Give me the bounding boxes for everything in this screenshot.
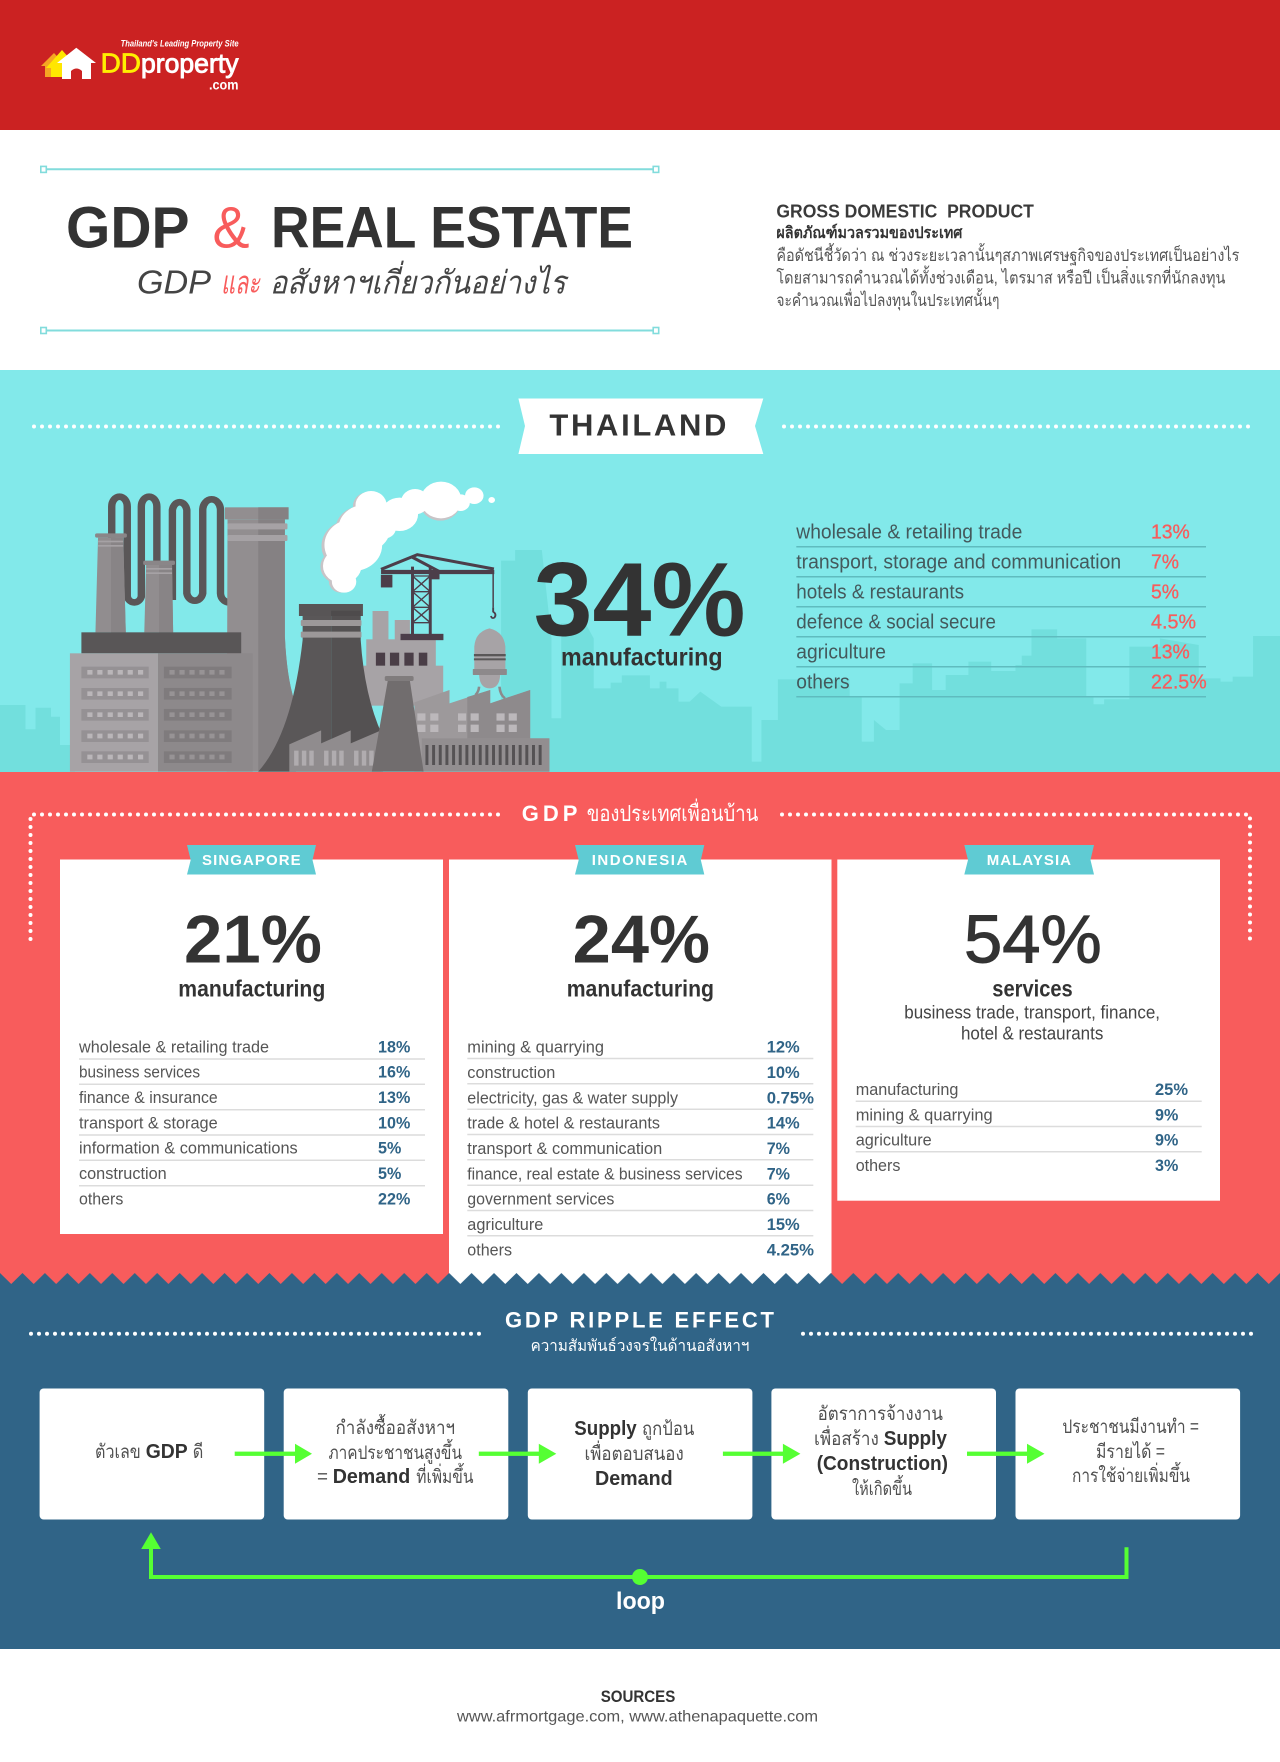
logo: DDproperty: property <box>141 48 239 78</box>
smoke <box>320 482 495 593</box>
box: employment: อัตราการจ้างงาน <box>818 1404 943 1425</box>
logo: DDproperty <box>41 38 239 92</box>
box: supply: ถูกป้อน <box>642 1419 694 1440</box>
stat: 54%: hotel & restaurants <box>961 1023 1103 1043</box>
arrow 2 <box>479 1444 556 1464</box>
box: supply: เพื่อตอบสนอง <box>584 1440 684 1465</box>
subtitle: อสังหาฯเกี่ยวกันอย่างไร <box>270 260 569 300</box>
box: employment: (Construction) <box>817 1453 948 1475</box>
back building <box>363 611 443 706</box>
list: Indonesia: 0.75% <box>767 1088 814 1107</box>
box: demand: Demand <box>333 1466 410 1488</box>
list: Malaysia <box>856 1080 1202 1175</box>
box: income: มีรายได้ = <box>1096 1441 1165 1463</box>
list: Indonesia: 12% <box>767 1038 800 1057</box>
left chimney <box>95 533 127 632</box>
heading: ความสัมพันธ์วงจรในด้านอสังหาฯ <box>531 1336 749 1355</box>
title frame <box>41 166 659 334</box>
list: Indonesia: transport & communication <box>467 1139 662 1158</box>
tag: Indonesia: INDONESIA <box>592 852 687 869</box>
illustration: factory <box>70 482 549 772</box>
arrow 4 <box>967 1444 1044 1464</box>
logo: DDproperty: .com <box>209 76 238 92</box>
box: employment: Supply <box>884 1428 948 1450</box>
box: demand: = <box>317 1467 328 1488</box>
logo: DDproperty: Thailand's Leading Property Site <box>121 38 239 50</box>
GDP definition text block: ผลิตภัณฑ์มวลรวมของประเทศ <box>776 223 963 242</box>
water tank <box>473 628 507 698</box>
list: Indonesia: others <box>467 1240 512 1259</box>
tag: Malaysia <box>964 845 1094 874</box>
arrow 3 <box>723 1444 800 1464</box>
Thailand breakdown list <box>795 521 1207 697</box>
box: demand: กำลังซื้ออสังหาฯ <box>336 1414 455 1439</box>
box: employment: เพื่อสร้าง <box>814 1425 879 1450</box>
subtitle: GDP <box>137 263 211 300</box>
GDP definition text block: จะคำนวณเพื่อไปลงทุนในประเทศนั้นๆ <box>776 288 999 311</box>
34% manufacturing: 34% <box>534 542 746 659</box>
subtitle: และ <box>221 264 261 300</box>
big chimney <box>225 507 296 772</box>
stat: 54% <box>904 902 1160 1043</box>
dotted divider <box>31 424 1251 428</box>
card: Singapore <box>60 845 443 1234</box>
list: Indonesia: construction <box>467 1063 555 1082</box>
Thailand breakdown list: 22.5% <box>1151 671 1207 693</box>
list: Singapore: information & communications <box>79 1139 298 1158</box>
cooling tower <box>258 604 383 772</box>
tag: Singapore <box>187 845 316 874</box>
list: Malaysia: agriculture <box>856 1131 932 1150</box>
dotted divider <box>30 1332 1252 1336</box>
crane <box>381 555 495 640</box>
list: Indonesia: electricity, gas & water supply <box>467 1088 678 1107</box>
Thailand breakdown list: hotels & restaurants <box>796 581 964 603</box>
box: GDP good <box>40 1388 264 1520</box>
subtitle <box>137 260 569 300</box>
list: Indonesia: 14% <box>767 1114 800 1133</box>
list: Singapore: construction <box>79 1164 167 1183</box>
Thailand breakdown list: others <box>796 671 850 693</box>
box: income: ประชาชนมีงานทำ = <box>1062 1416 1199 1438</box>
list: Malaysia: 9% <box>1155 1131 1178 1150</box>
logo: DDproperty: DD <box>101 47 141 78</box>
list: Malaysia: manufacturing <box>856 1080 958 1099</box>
stat: 54%: services <box>992 976 1073 1002</box>
list: Singapore: 13% <box>378 1088 410 1107</box>
box: GDP good: GDP <box>146 1441 188 1463</box>
panel: neighbouring countries <box>0 772 1280 1274</box>
card: Indonesia <box>449 845 832 1274</box>
list: Indonesia: agriculture <box>467 1215 543 1234</box>
list: Malaysia: 3% <box>1155 1156 1178 1175</box>
stat: 54%: business trade, transport, finance, <box>904 1002 1160 1022</box>
list: Malaysia: mining & quarrying <box>856 1105 993 1124</box>
GDP definition text block: GROSS DOMESTIC PRODUCT <box>776 201 1035 222</box>
list: Singapore: 18% <box>378 1037 410 1056</box>
box: demand: ที่เพิ่มขึ้น <box>416 1463 474 1488</box>
list: Indonesia: 10% <box>767 1063 800 1082</box>
list: Singapore: 22% <box>378 1189 410 1208</box>
stat: 24%: 24% <box>573 902 710 978</box>
GDP definition text block <box>776 201 1239 311</box>
box: demand: ภาคประชาชนสูงขึ้น <box>328 1439 462 1464</box>
list: Malaysia: 9% <box>1155 1105 1178 1124</box>
list: Singapore: 16% <box>378 1063 410 1082</box>
list: Indonesia: government services <box>467 1190 614 1209</box>
front chimney <box>372 676 424 772</box>
middle chimney <box>143 561 175 632</box>
skyline left <box>0 705 75 772</box>
Thailand breakdown list: 7% <box>1151 551 1179 573</box>
list: Singapore: finance & insurance <box>79 1088 218 1107</box>
right factory hall <box>414 690 549 772</box>
box: employment: ให้เกิดขึ้น <box>852 1475 912 1500</box>
Thailand breakdown list: 13% <box>1151 641 1190 663</box>
main building <box>70 632 253 772</box>
list: Singapore: 5% <box>378 1164 401 1183</box>
list: Indonesia: 6% <box>767 1190 790 1209</box>
stat: 21%: 21% <box>184 902 322 978</box>
loop arrow <box>141 1532 1126 1615</box>
title: & <box>212 195 250 260</box>
dotted frame <box>30 814 1250 945</box>
tag: Singapore: SINGAPORE <box>202 852 301 869</box>
list: Singapore: wholesale & retailing trade <box>78 1037 269 1056</box>
list: Indonesia <box>467 1038 814 1259</box>
list: Indonesia: mining & quarrying <box>467 1038 604 1057</box>
box: GDP good: ตัวเลข <box>95 1442 141 1463</box>
box: supply: Supply <box>574 1418 638 1440</box>
34% manufacturing: manufacturing <box>561 644 723 672</box>
box: supply <box>528 1388 752 1520</box>
section heading: GDP <box>522 801 577 826</box>
list: Singapore: business services <box>79 1063 200 1082</box>
panel: Thailand <box>0 370 1280 772</box>
small factory front <box>289 730 381 772</box>
list: Indonesia: 4.25% <box>767 1240 814 1259</box>
list: Malaysia: others <box>856 1156 900 1175</box>
box: income: การใช้จ่ายเพิ่มขึ้น <box>1072 1462 1190 1487</box>
Thailand breakdown list: transport, storage and communication <box>796 551 1121 573</box>
box: demand <box>284 1388 508 1520</box>
loop arrow: loop <box>616 1588 665 1615</box>
box: supply: Demand <box>595 1468 673 1490</box>
serpentine pipe <box>112 497 231 602</box>
stat: 21%: manufacturing <box>178 976 325 1002</box>
list: Singapore: transport & storage <box>79 1113 218 1132</box>
list: Singapore <box>78 1037 425 1208</box>
stat: 24%: manufacturing <box>567 976 714 1002</box>
sources <box>456 1688 818 1726</box>
list: Indonesia: trade & hotel & restaurants <box>467 1114 660 1133</box>
panel: GDP ripple effect <box>0 1273 1280 1649</box>
tag: Malaysia: MALAYSIA <box>987 852 1071 869</box>
sources: SOURCES <box>601 1688 675 1706</box>
list: Singapore: others <box>79 1189 123 1208</box>
tag: Indonesia <box>575 845 704 874</box>
box: employment <box>771 1388 996 1520</box>
title <box>66 195 633 260</box>
icon: houses <box>41 48 96 79</box>
header band <box>0 0 1280 130</box>
list: Singapore: 10% <box>378 1113 410 1132</box>
Thailand breakdown list: 5% <box>1151 581 1179 603</box>
skyline right <box>501 550 1280 772</box>
list: Singapore: 5% <box>378 1139 401 1158</box>
section heading <box>522 798 758 826</box>
Thailand breakdown list: defence & social secure <box>796 611 996 633</box>
section heading: ของประเทศเพื่อนบ้าน <box>587 798 758 826</box>
sources: www.afrmortgage.com, www.athenapaquette.com <box>456 1709 818 1726</box>
box: GDP good: ดี <box>193 1441 203 1463</box>
title: GDP <box>66 195 190 260</box>
Thailand breakdown list: 13% <box>1151 521 1190 543</box>
list: Indonesia: 7% <box>767 1139 790 1158</box>
heading <box>505 1308 775 1355</box>
box: income <box>1016 1388 1240 1520</box>
title: REAL ESTATE <box>271 195 633 260</box>
list: Indonesia: 7% <box>767 1164 790 1183</box>
arrow 1 <box>235 1444 312 1464</box>
Thailand breakdown list: wholesale & retailing trade <box>795 521 1022 543</box>
Thailand banner <box>518 398 763 454</box>
list: Indonesia: finance, real estate & business services <box>467 1164 743 1183</box>
card: Malaysia <box>837 845 1220 1201</box>
heading: GDP RIPPLE EFFECT <box>505 1308 775 1333</box>
Thailand breakdown list: agriculture <box>796 641 886 663</box>
list: Indonesia: 15% <box>767 1215 800 1234</box>
Thailand banner: THAILAND <box>549 408 726 443</box>
Thailand breakdown list: 4.5% <box>1151 611 1196 633</box>
list: Malaysia: 25% <box>1155 1080 1188 1099</box>
stat: 54%: 54% <box>964 902 1102 978</box>
